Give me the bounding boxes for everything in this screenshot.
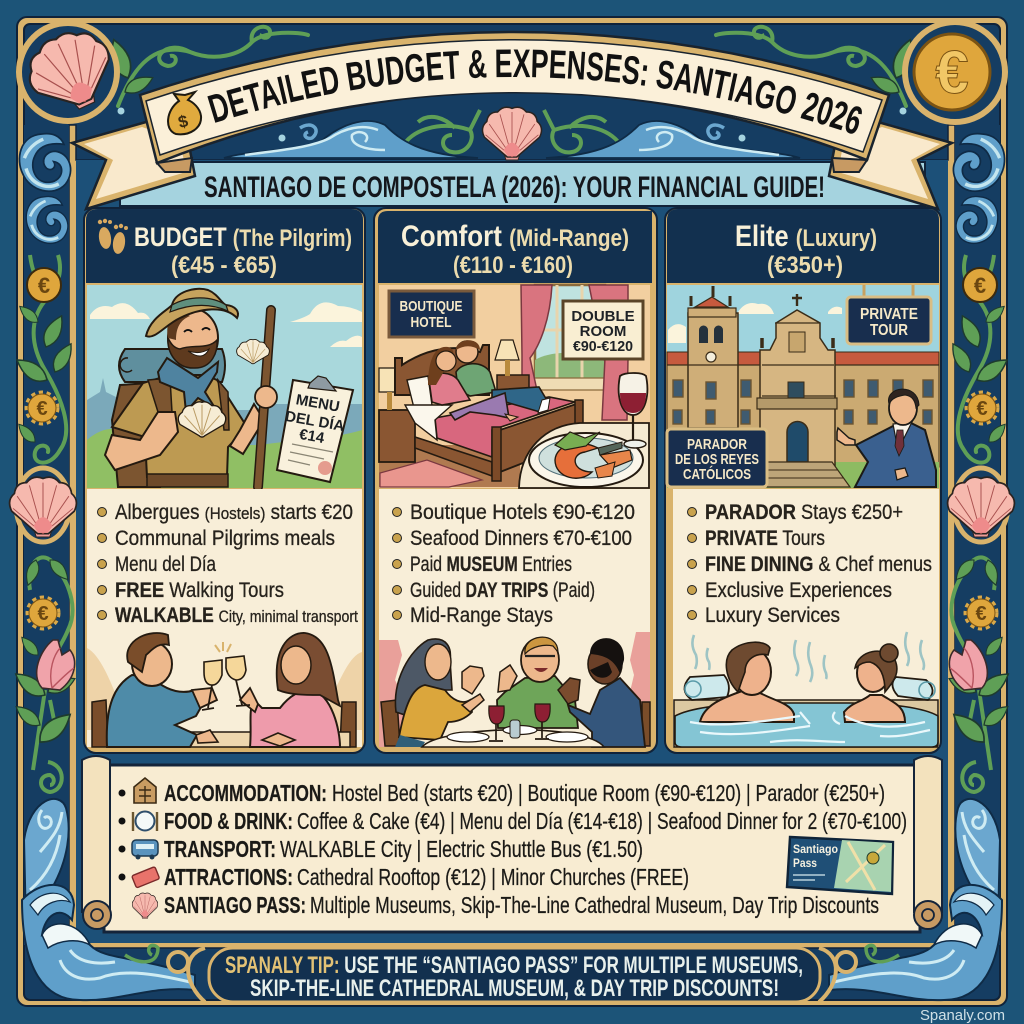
comfort header xyxy=(378,211,652,283)
pilgrim illustration xyxy=(87,285,362,488)
backpack xyxy=(112,383,160,487)
double room sign: €90-€120 xyxy=(573,338,633,355)
budget list xyxy=(87,489,362,642)
scroll: expense details xyxy=(82,756,942,932)
scarf xyxy=(158,358,218,412)
boutique sign: BOUTIQUE xyxy=(400,298,462,315)
watermark: Spanaly.com xyxy=(920,1007,1005,1024)
woman reclining xyxy=(429,373,470,405)
woman in pool xyxy=(844,695,905,722)
hat xyxy=(146,289,238,337)
comfort list: Paid MUSEUM Entries xyxy=(410,553,572,576)
hand xyxy=(255,386,277,408)
shell on chest xyxy=(178,402,226,437)
left border coins xyxy=(27,268,61,628)
double room sign: DOUBLE xyxy=(571,308,635,325)
left roller xyxy=(82,756,111,929)
comfort header: Comfort (Mid-Range) xyxy=(401,220,629,253)
food and drink row: FOOD & DRINK: xyxy=(164,808,293,834)
icon: corner euro coin: € xyxy=(935,39,969,106)
man reclining xyxy=(456,364,496,396)
icon: money bag xyxy=(168,92,201,134)
steps xyxy=(767,462,850,487)
double room sign: ROOM xyxy=(580,323,626,340)
centre diner xyxy=(497,676,578,728)
menu clipboard xyxy=(277,376,353,482)
elite list: PARADOR Stays €250+ xyxy=(705,501,903,524)
parador sign: CATÓLICOS xyxy=(683,465,751,483)
parador sign: DE LOS REYES xyxy=(675,451,759,468)
budget list: Communal Pilgrims meals xyxy=(115,527,335,550)
food and drink row xyxy=(118,808,907,834)
boutique hotel illustration xyxy=(379,285,650,488)
elite list: Exclusive Experiences xyxy=(705,579,892,602)
tip banner: SKIP-THE-LINE CATHEDRAL MUSEUM, & DAY TRIP DISCOUNTS! xyxy=(250,975,779,1002)
comfort list: Guided DAY TRIPS (Paid) xyxy=(410,579,595,602)
man in pool xyxy=(700,690,794,722)
budget header: (€45 - €65) xyxy=(171,252,277,279)
left diner xyxy=(395,639,452,715)
elite list: Luxury Services xyxy=(705,604,840,627)
double room sign xyxy=(563,301,643,359)
santiago pass row xyxy=(132,892,879,918)
bedroll xyxy=(119,349,225,382)
accommodation row: ACCOMMODATION: xyxy=(164,780,327,806)
head xyxy=(168,309,218,367)
title: DETAILED BUDGET & EXPENSES: SANTIAGO 2026 xyxy=(207,50,862,134)
santiago pass card xyxy=(787,837,893,894)
tower xyxy=(688,313,738,428)
shirt xyxy=(112,375,247,477)
budget list: FREE Walking Tours xyxy=(115,579,284,602)
menu clipboard: €14 xyxy=(298,426,326,447)
comfort list: Mid-Range Stays xyxy=(410,604,553,627)
top corner vines and waves xyxy=(106,27,918,158)
right roller xyxy=(914,756,942,929)
attractions row: ATTRACTIONS: xyxy=(164,864,293,890)
tip banner xyxy=(209,948,820,1002)
santiago pass row: SANTIAGO PASS: xyxy=(164,892,306,918)
comfort list xyxy=(379,489,650,642)
table xyxy=(519,423,649,488)
table items xyxy=(447,732,489,742)
right nightstand and lamp xyxy=(497,375,529,391)
right border coins: € xyxy=(975,603,987,625)
comfort list: Boutique Hotels €90-€120 xyxy=(410,501,635,524)
tip banner: SPANALY TIP: USE THE “SANTIAGO PASS” FOR MULTIPLE MUSEUMS, xyxy=(225,952,803,979)
comfort dining scene xyxy=(379,632,650,747)
elite list: FINE DINING & Chef menus xyxy=(705,553,932,576)
budget header: BUDGET (The Pilgrim) xyxy=(134,222,352,252)
wine glass xyxy=(619,373,647,415)
santiago pass card: Pass xyxy=(793,856,817,870)
headboard xyxy=(395,345,489,395)
parador illustration xyxy=(667,285,939,488)
title ribbon xyxy=(68,30,956,211)
boutique sign: HOTEL xyxy=(410,314,452,331)
right diner xyxy=(568,678,645,747)
icon: money bag: $ xyxy=(176,111,191,132)
attractions row: Cathedral Rooftop (€12) | Minor Churches (FREE) xyxy=(297,864,689,890)
boutique sign xyxy=(389,291,474,337)
window xyxy=(535,285,605,380)
water ripples xyxy=(690,712,930,742)
guide in suit xyxy=(837,389,936,487)
accommodation row xyxy=(118,778,885,806)
panel: elite xyxy=(665,208,941,753)
pillow and sheet xyxy=(407,376,432,408)
panel: comfort xyxy=(374,208,657,753)
windows xyxy=(673,380,933,424)
straps xyxy=(148,378,229,430)
right border coins: € xyxy=(976,398,988,420)
elite list xyxy=(673,489,939,642)
menu clipboard: MENU xyxy=(295,391,341,416)
elite list: PRIVATE Tours xyxy=(705,527,825,550)
budget header xyxy=(86,209,363,283)
budget list: Albergues (Hostels) starts €20 xyxy=(115,501,353,524)
private tour sign: TOUR xyxy=(870,322,908,339)
staff xyxy=(258,310,271,487)
budget list: Menu del Día xyxy=(115,553,216,576)
elite header: (€350+) xyxy=(767,252,843,279)
table xyxy=(422,730,604,747)
private tour sign: PRIVATE xyxy=(860,306,918,323)
left border ornaments xyxy=(10,125,205,1002)
right border coins: € xyxy=(974,273,986,298)
right arm xyxy=(230,404,264,454)
transport row: WALKABLE City | Electric Shuttle Bus (€1.50) xyxy=(280,836,643,862)
icon: scallop shell centre xyxy=(482,107,542,160)
elite header: Elite (Luxury) xyxy=(735,220,877,253)
attractions row xyxy=(118,864,689,890)
towels xyxy=(684,675,729,700)
comfort header: (€110 - €160) xyxy=(453,252,573,279)
subtitle band xyxy=(120,162,925,206)
left border coins: € xyxy=(36,398,48,420)
elite spa scene xyxy=(673,632,939,747)
elite header xyxy=(667,209,939,283)
left nightstand and lamp xyxy=(379,410,415,462)
mattress xyxy=(435,397,575,457)
parador sign xyxy=(667,429,767,487)
menu clipboard: DEL DÍA xyxy=(284,408,346,435)
private tour sign xyxy=(847,285,931,344)
transport row: TRANSPORT: xyxy=(164,836,276,862)
icon: footprints xyxy=(98,219,128,255)
floor xyxy=(379,445,520,487)
budget list: WALKABLE City, minimal transport xyxy=(115,604,358,627)
trousers xyxy=(147,474,228,487)
left border coins: € xyxy=(38,273,50,298)
icon: corner scallop shell xyxy=(17,20,125,123)
budget dining scene xyxy=(87,633,362,747)
panel: budget xyxy=(84,208,365,753)
santiago pass card: Santiago xyxy=(793,842,838,856)
right border coins xyxy=(963,268,997,628)
parador sign: PARADOR xyxy=(687,436,747,453)
central facade xyxy=(760,310,835,467)
right border ornaments xyxy=(819,125,1014,1002)
icon: corner euro coin xyxy=(905,22,1005,122)
comfort list: Seafood Dinners €70-€100 xyxy=(410,527,632,550)
left border coins: € xyxy=(37,603,49,625)
transport row xyxy=(118,836,643,862)
seafood plate xyxy=(529,433,643,487)
left arm xyxy=(105,412,178,470)
